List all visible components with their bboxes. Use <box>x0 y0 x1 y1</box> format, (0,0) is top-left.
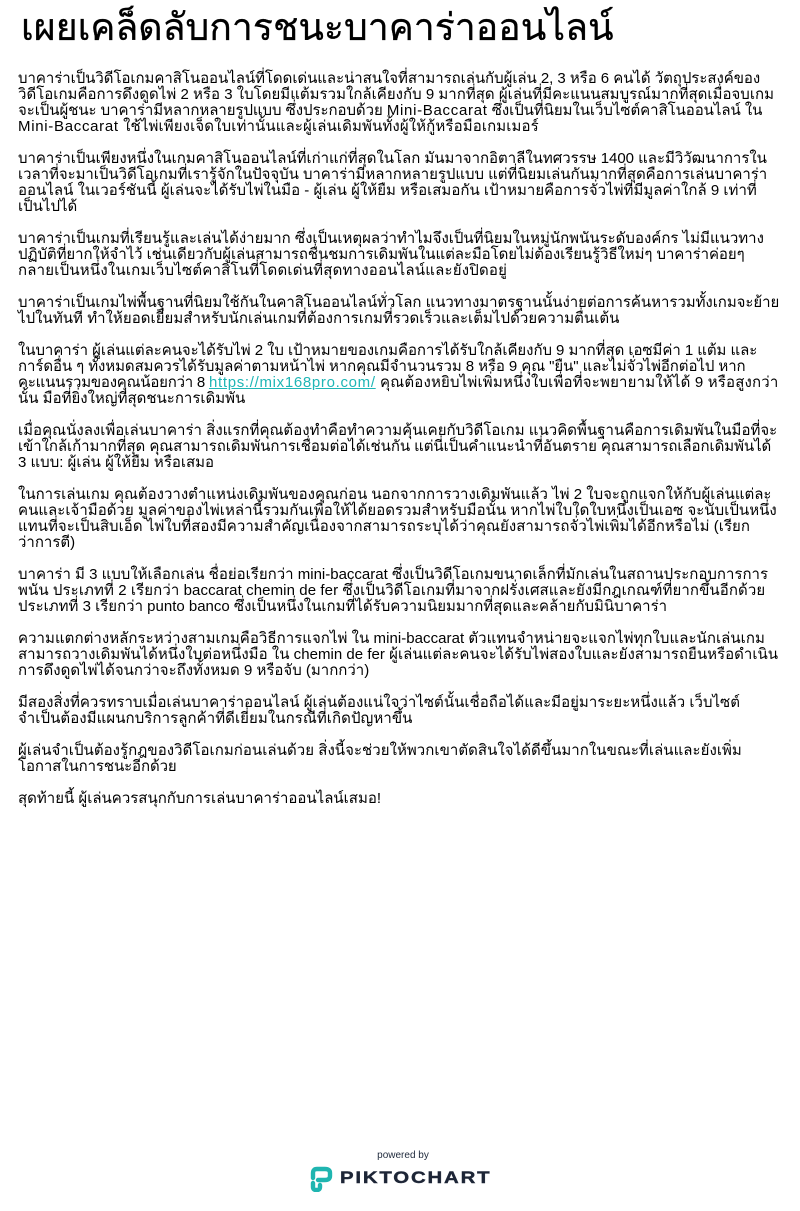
text block: differences: การดึงดูดไพ่ได้จนกว่าจะถึงทั้งหมด 9 หรือจับ (มากกว่า) <box>18 662 369 679</box>
text block: history: เวลาที่จะมาเป็นวิดีโอเกมที่เรารู้จักในปัจจุบัน บาคาร่ามีหลากหลายรูปแบบ แต่ที่นิยมเล่นกันมากที่สุดคือการเล่นบาคาร่า <box>18 166 767 183</box>
text block: three variants: ประเภทที่ 3 เรียกว่า punto banco ซึ่งเป็นหนึ่งในเกมที่ได้รับความนิยมมากที่สุดและคล้ายกับมินิบาคาร่า <box>18 598 667 615</box>
text block: rules with link: นั้น มือที่ยิ่งใหญ่ที่สุดชนะการเดิมพัน <box>18 390 245 407</box>
text block: getting started <box>18 419 777 471</box>
text block: introduction: บาคาร่าเป็นวิดีโอเกมคาสิโนออนไลน์ที่โดดเด่นและน่าสนใจที่สามารถเล่นกับผู้เล่น 2, 3 หรือ 6 คนได้ วัตถุประสงค์ของ <box>18 70 760 87</box>
text block: three variants: พนัน ประเภทที่ 2 เรียกว่า baccarat chemin de fer ซึ่งเป็นวิดีโอเกมที่มาจากฝรั่งเศสและยังมีกฎเกณฑ์ที่ยากขึ้นอีกด้วย <box>18 582 765 599</box>
text block: introduction: จะเป็นผู้ชนะ บาคาร่ามีหลากหลายรูปแบบ ซึ่งประกอบด้วย Mini-Baccarat ซึ่งเป็นที่นิยมในเว็บไซต์คาสิโนออนไลน์ ใน <box>18 102 762 119</box>
text block: placing bets: ในการเล่นเกม คุณต้องวางตำแหน่งเดิมพันของคุณก่อน นอกจากการวางเดิมพันแล้ว ไพ่ 2 ใบจะถูกแจกให้กับผู้เล่นแต่ละ <box>18 486 771 503</box>
text block: getting started: 3 แบบ: ผู้เล่น ผู้ให้ยืม หรือเสมอ <box>18 454 214 471</box>
text block: learn the rules <box>18 739 742 775</box>
text block: introduction <box>18 68 774 135</box>
text block: choosing a site: จำเป็นต้องมีแผนกบริการลูกค้าที่ดีเยี่ยมในกรณีที่เกิดปัญหาขึ้น <box>18 710 412 727</box>
text block: worldwide popularity <box>17 291 779 327</box>
text block: easy to learn: บาคาร่าเป็นเกมที่เรียนรู้และเล่นได้ง่ายมาก ซึ่งเป็นเหตุผลว่าทำไมจึงเป็นที่นิยมในหมู่นักพนันระดับองค์กร ไม่มีแนวทาง <box>18 230 764 247</box>
text block: placing bets <box>18 486 777 551</box>
text block: getting started: เข้าใกล้เก้ามากที่สุด คุณสามารถเดิมพันการเชื่อมต่อได้เช่นกัน แต่นี่เป็นคำแนะนำที่อันตราย คุณสามารถเลือกเดิมพันได้ <box>18 438 771 455</box>
text block: getting started: เมื่อคุณนั่งลงเพื่อเล่นบาคาร่า สิ่งแรกที่คุณต้องทำคือทำความคุ้นเคยกับวิดีโอเกม แนวคิดพื้นฐานคือการเดิมพันในมือที่จะ <box>18 422 777 439</box>
text block: three variants <box>18 564 768 616</box>
text block: history: บาคาร่าเป็นเพียงหนึ่งในเกมคาสิโนออนไลน์ที่เก่าแก่ที่สุดในโลก มันมาจากอิตาลีในทศวรรษ 1400 และมีวิวัฒนาการใน <box>18 150 767 167</box>
text block: rules with link: คะแนนรวมของคุณน้อยกว่า 8 https://mix168pro.com/ คุณต้องหยิบไพ่เพิ่มหนึ่งใบเพื่อที่จะพยายามให้ได้ 9 หรือสูงกว่า <box>18 374 779 391</box>
text block: easy to learn: กลายเป็นหนึ่งในเกมเว็บไซต์คาสิโนที่โดดเด่นที่สุดทางออนไลน์และยังปิดอยู่ <box>18 262 507 279</box>
text block: closing: สุดท้ายนี้ ผู้เล่นควรสนุกกับการเล่นบาคาร่าออนไลน์เสมอ! <box>18 790 381 807</box>
text block: placing bets: คนและเจ้ามือด้วย มูลค่าของไพ่เหล่านี้รวมกันเพื่อให้ได้ยอดรวมสำหรับมือนั้น หากไพ่ใบใดใบหนึ่งเป็นเอซ จะนับเป็นหนึ่ง <box>18 502 777 519</box>
text block: history: ออนไลน์ ในเวอร์ชันนี้ ผู้เล่นจะได้รับไพ่ในมือ - ผู้เล่น ผู้ให้ยืม หรือเสมอกัน เป้าหมายคือการจั่วไพ่ที่มีมูลค่าใกล้ 9 เท่าที่ <box>18 182 757 199</box>
text block: introduction: วิดีโอเกมคือการดึงดูดไพ่ 2 หรือ 3 ใบโดยมีแต้มรวมใกล้เคียงกับ 9 มากที่สุด ผู้เล่นที่มีคะแนนสมบูรณ์มากที่สุดเมื่อจบเกม <box>18 86 774 103</box>
text block: worldwide popularity: บาคาร่าเป็นเกมไพ่พื้นฐานที่นิยมใช้กันในคาสิโนออนไลน์ทั่วโลก แนวทางมาตรฐานนั้นง่ายต่อการค้นหารวมทั้งเกมจะย้าย <box>18 294 779 311</box>
powered by label: powered by <box>377 1150 429 1161</box>
text block: easy to learn <box>18 228 764 280</box>
text block: learn the rules: ผู้เล่นจำเป็นต้องรู้กฎของวิดีโอเกมก่อนเล่นด้วย สิ่งนี้จะช่วยให้พวกเขาตัดสินใจได้ดีขึ้นมากในขณะที่เล่นและยังเพิ่ม <box>18 742 742 759</box>
text block: rules with link <box>18 340 779 408</box>
text block: worldwide popularity: ไปในทันที ทำให้ยอดเยี่ยมสำหรับนักเล่นเกมที่ต้องการเกมที่รวดเร็วและเต็มไปด้วยความตื่นเต้น <box>18 310 619 327</box>
piktochart wordmark: PIKTOCHART <box>340 1168 491 1187</box>
text block: rules with link: การ์ดอื่น ๆ ทั้งหมดสมควรได้รับมูลค่าตามหน้าไพ่ หากคุณมีจำนวนรวม 8 หรือ 9 คุณ "ยืน" และไม่จั่วไพ่อีกต่อไป หาก <box>18 358 746 375</box>
footer: powered by piktochart <box>310 1150 491 1192</box>
text block: choosing a site: มีสองสิ่งที่ควรทราบเมื่อเล่นบาคาร่าออนไลน์ ผู้เล่นต้องแน่ใจว่าไซต์นั้นเชื่อถือได้และมีอยู่มาระยะหนึ่งแล้ว เว็บไซต์ <box>18 694 740 711</box>
text block: differences: สามารถวางเดิมพันได้หนึ่งใบต่อหนึ่งมือ ใน chemin de fer ผู้เล่นแต่ละคนจะได้รับไพ่สองใบและยังสามารถยืนหรือดำเนิน <box>18 646 778 663</box>
text block: learn the rules: โอกาสในการชนะอีกด้วย <box>18 758 177 775</box>
text block: history: เป็นไปได้ <box>18 198 77 215</box>
text block: differences <box>18 630 778 679</box>
text block: placing bets: ว่าการตี) <box>18 534 75 551</box>
text block: rules with link: ในบาคาร่า ผู้เล่นแต่ละคนจะได้รับไพ่ 2 ใบ เป้าหมายของเกมคือการได้รับใกล้เคียงกับ 9 มากที่สุด เอซมีค่า 1 แต้ม และ <box>18 342 757 359</box>
text block: three variants: บาคาร่า มี 3 แบบให้เลือกเล่น ชื่อย่อเรียกว่า mini-baccarat ซึ่งเป็นวิดีโอเกมขนาดเล็กที่มักเล่นในสถานประกอบการการ <box>18 566 768 583</box>
text block: introduction: Mini-Baccarat ใช้ไพ่เพียงเจ็ดใบเท่านั้นและผู้เล่นเดิมพันทั้งผู้ให้กู้หรือมือเกมเมอร์ <box>18 118 539 135</box>
text block: choosing a site <box>18 691 740 727</box>
text block: differences: ความแตกต่างหลักระหว่างสามเกมคือวิธีการแจกไพ่ ใน mini-baccarat ตัวแทนจำหน่ายจะแจกไพ่ทุกใบและนักเล่นเกม <box>18 630 765 647</box>
text block: easy to learn: ปฏิบัติที่ยากให้จำไว้ เช่นเดียวกับผู้เล่นสามารถชื่นชมการเดิมพันในแต่ละมือโดยไม่ต้องเรียนรู้วิธีใหม่ๆ บาคาร่าค่อยๆ <box>18 246 745 263</box>
title: เผยเคล็ดลับการชนะบาคาร่าออนไลน์ <box>21 6 614 48</box>
text block: placing bets: แทนที่จะเป็นสิบเอ็ด ไพ่ใบที่สองมีความสำคัญเนื่องจากสามารถระบุได้ว่าคุณยังสามารถจั่วไพ่เพิ่มได้อีกหรือไม่ (เรียก <box>18 518 750 535</box>
icon: piktochart logo <box>310 1166 332 1192</box>
text block: history <box>18 148 767 215</box>
